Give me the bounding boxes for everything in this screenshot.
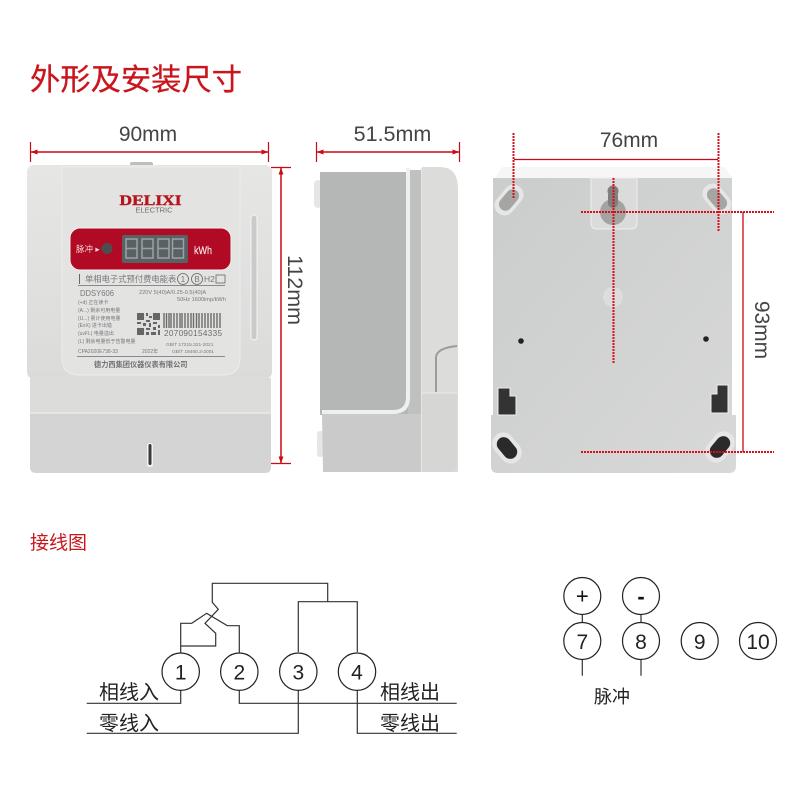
plus terminal: + [576, 584, 589, 608]
dimension: depth 51.5mm: 51.5mm [354, 122, 431, 146]
product label text: GB/T 17215.321-2021 [166, 342, 214, 348]
product label text: 2022年 [142, 348, 158, 355]
terminal 7 [564, 622, 601, 660]
terminal 10: 10 [746, 631, 770, 654]
wiring heading: 接线图 [30, 532, 87, 554]
top-right mounting slot [698, 180, 736, 218]
side dark panel [320, 172, 408, 415]
back main plate [491, 178, 736, 473]
top-left mounting slot [490, 181, 528, 219]
pulse label: 脉冲 [594, 687, 630, 707]
product label text: GB/T 18460.3-2001 [172, 349, 214, 355]
product label text: (ExX) 进卡出错 [78, 322, 112, 329]
product label text: 德力西集团仪器仪表有限公司 [94, 360, 187, 369]
side hinge notch [436, 346, 457, 392]
left rectangular cutout [498, 388, 516, 415]
plus terminal [564, 578, 601, 614]
terminal 7: 7 [576, 631, 588, 654]
terminal 8 [622, 622, 660, 660]
title: 外形及安装尺寸 [30, 63, 242, 97]
logo: ELECTRIC: ELECTRIC [135, 206, 173, 214]
dimension: front width 90mm [30, 123, 268, 162]
side front section [422, 167, 458, 472]
product label text: 220V 5(40)A/0.25-0.5(40)A [139, 290, 206, 296]
dotted guide lines [514, 133, 774, 452]
side mounting feet [314, 180, 322, 208]
right rectangular cutout [711, 385, 728, 413]
bottom-right mounting slot [701, 427, 739, 467]
meter top tab [130, 162, 153, 168]
bottom-left mounting slot [488, 428, 526, 468]
logo: DELIXI: DELIXI [120, 193, 182, 209]
wire labels: 相线入 [99, 681, 159, 704]
terminal 3 [280, 653, 317, 690]
wire labels [99, 681, 440, 735]
meter side view [314, 167, 458, 472]
pulse wires [582, 612, 641, 676]
dimension: height 112mm [271, 168, 307, 464]
meter front view [27, 162, 272, 473]
dimension label 93mm: 93mm [750, 301, 773, 359]
back top edge [495, 167, 732, 178]
wires [87, 583, 457, 733]
terminal 2 [221, 653, 258, 690]
red display band [70, 228, 231, 270]
keyhole mounting tab [591, 178, 637, 229]
barcode: 207090154335 [164, 329, 222, 338]
dimension: front width 90mm: 90mm [119, 123, 177, 146]
dimension: depth 51.5mm [316, 122, 460, 162]
back mounting dimension lines [514, 133, 774, 452]
wiring diagram: terminals 1-4 [87, 583, 457, 735]
product label text: (L) 剩余电量低于告警电量 [78, 338, 136, 345]
wiring diagram: pulse terminals [564, 578, 776, 707]
wire labels: 相线出 [380, 681, 440, 704]
product label text [77, 274, 226, 369]
product label text: 50Hz 1600imp/kWh [177, 297, 226, 303]
side lower body [322, 414, 421, 472]
small holes [518, 336, 709, 344]
product label text: CPA2020E738-33 [78, 349, 118, 355]
terminal 3: 3 [292, 662, 304, 684]
terminal 10 [740, 622, 776, 660]
red display band: 脉冲 ▸ [76, 244, 100, 254]
dimension label 76mm: 76mm [600, 129, 658, 152]
side white curved stripe [322, 168, 408, 412]
terminal 9: 9 [694, 631, 706, 654]
wire labels: 零线出 [380, 712, 440, 735]
product label text: DDSY606 [80, 288, 114, 298]
terminal 4: 4 [351, 662, 363, 684]
meter side slot [251, 215, 257, 340]
terminal 4 [338, 653, 376, 690]
meter back view [488, 167, 739, 473]
solid dimension line 93mm [742, 212, 744, 452]
product label text: H2 [204, 274, 215, 284]
wire labels: 零线入 [99, 712, 159, 735]
terminal 1 [162, 653, 199, 690]
barcode [164, 313, 222, 338]
minus terminal [622, 578, 660, 614]
product label text: 单相电子式预付费电能表 [85, 274, 177, 284]
solid dimension line 76mm [514, 158, 718, 160]
QR code [137, 313, 160, 335]
meter raised label panel [62, 167, 240, 375]
dimension: height 112mm: 112mm [283, 255, 307, 325]
meter terminal cover [30, 378, 271, 473]
product label text: (U...) 累计使用电量 [78, 315, 120, 322]
side mid strip [408, 170, 423, 415]
product label text: (A...) 剩余可用电量 [78, 307, 120, 314]
product label text: 1 [181, 275, 186, 284]
terminal 2: 2 [233, 662, 245, 684]
four seven-segment digits [126, 239, 184, 258]
minus terminal: - [637, 584, 645, 609]
center dimple [603, 287, 623, 307]
terminal 1: 1 [175, 662, 187, 684]
product label text: B [194, 275, 200, 284]
terminal 9 [681, 622, 718, 660]
product label text: (uvFL) 电量溢出 [78, 330, 114, 337]
terminal 8: 8 [635, 631, 647, 654]
product label text: (+d) 正在读卡 [78, 299, 108, 306]
red display band: kWh [194, 245, 212, 257]
meter upper body [27, 165, 272, 379]
